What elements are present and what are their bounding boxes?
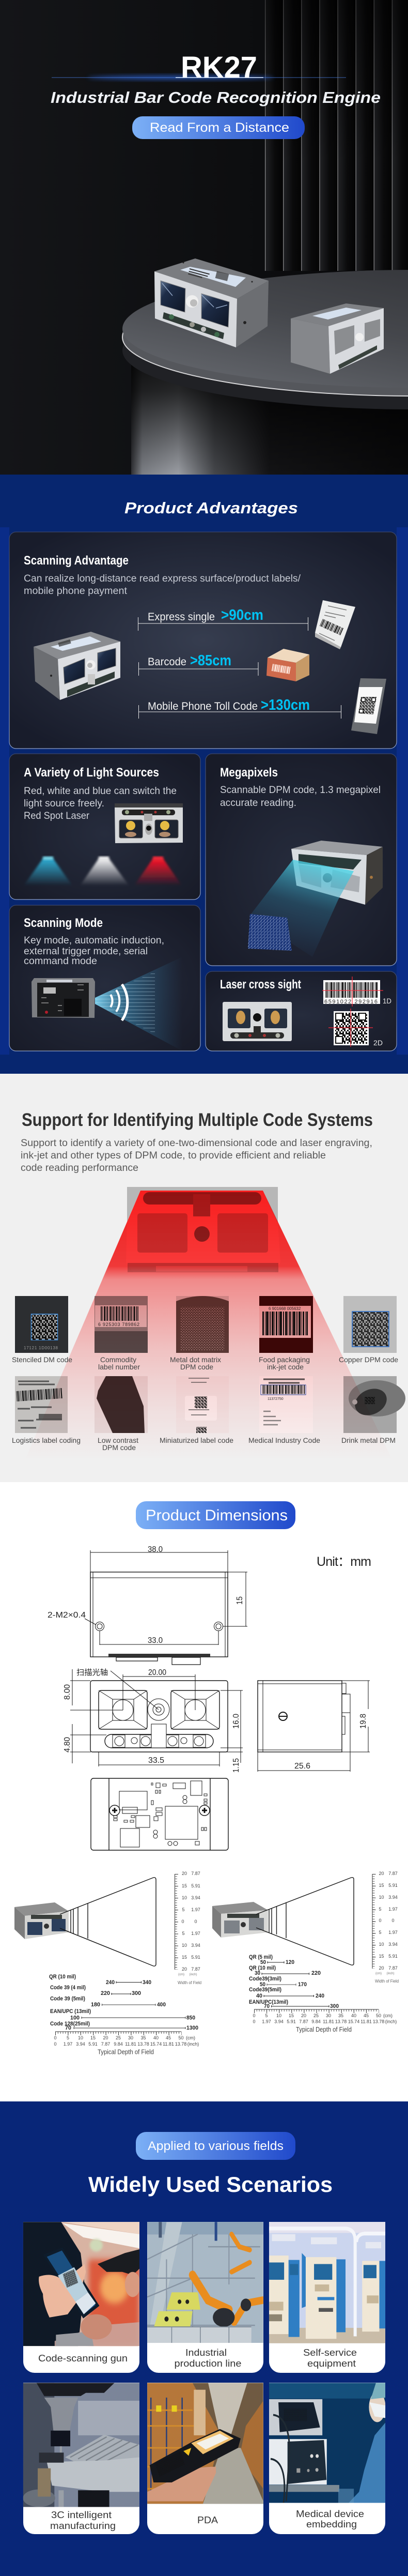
- drawing: front view: 33.5: [148, 1756, 164, 1765]
- depth ruler: 5.91: [287, 2019, 296, 2024]
- depth ruler: 1.97: [262, 2019, 271, 2024]
- thumbnail captions: Food packaging: [259, 1355, 310, 1364]
- photo: factory robots: [147, 2222, 263, 2343]
- depth ruler: 10: [276, 2013, 281, 2018]
- width scale: (inch): [386, 1972, 395, 1975]
- thumb: food packaging: [259, 1296, 313, 1353]
- depth ruler: 0: [253, 2013, 256, 2018]
- drawing: front view: 16.0: [232, 1714, 241, 1729]
- panel text: [24, 573, 301, 597]
- depth ranges: QR (5 mil): [249, 1954, 273, 1960]
- drawing: front view: 4.80: [63, 1737, 72, 1752]
- panel text: Key mode, automatic induction,: [24, 935, 164, 946]
- thumb: low contrast DPM: [95, 1376, 148, 1433]
- card: code-scanning gun: [23, 2222, 140, 2373]
- depth ruler: 50: [178, 2035, 184, 2040]
- distance: express single: >90cm: [221, 607, 263, 623]
- icon: red light cone: [134, 857, 182, 886]
- depth ranges: Code39(3mil): [249, 1976, 281, 1982]
- thumbnail captions: Copper DPM code: [339, 1355, 398, 1364]
- barcode 1D: 6591022 292916: [324, 999, 378, 1005]
- photo: medical equipment: [269, 2383, 386, 2503]
- caption: Medical device: [296, 2509, 364, 2519]
- thumbnail captions: label number: [98, 1363, 140, 1371]
- panel text: Red, white and blue can switch the: [24, 786, 177, 797]
- card: medical device embedding: [269, 2383, 386, 2534]
- depth ruler: 7.87: [101, 2041, 110, 2047]
- depth ruler: [253, 2009, 397, 2024]
- depth ranges: [249, 1954, 339, 2009]
- thumbnail captions: [12, 1355, 398, 1452]
- panel text: light source freely.: [24, 798, 104, 809]
- pill: product dimensions: [136, 1501, 295, 1529]
- icon: shipping label parcel: [315, 600, 355, 649]
- icon: cardboard box: [266, 649, 309, 681]
- width scale: 20: [379, 1965, 384, 1971]
- thumb: stenciled DM: 17121 1D00138: [24, 1346, 58, 1350]
- panel heading: Laser cross sight: [220, 978, 301, 992]
- drawing: top view: 15: [236, 1596, 244, 1605]
- section: code systems: [0, 1074, 408, 1482]
- section: product dimensions: [0, 1482, 408, 2101]
- depth ranges: 340: [143, 1979, 151, 1986]
- glow line: [52, 75, 346, 80]
- depth ranges: 50: [260, 1959, 266, 1965]
- thumb: medical code: [259, 1376, 313, 1433]
- panel text: mobile phone payment: [24, 586, 128, 597]
- thumbnail captions: DPM code: [102, 1443, 136, 1452]
- thumbnail captions: Stenciled DM code: [12, 1355, 72, 1364]
- panel: laser cross sight: [206, 971, 397, 1051]
- icon: scanner front: [223, 1002, 292, 1041]
- width scale: 1.97: [191, 1931, 200, 1936]
- label 2D: 2D: [373, 1039, 383, 1047]
- depth ranges: 300: [330, 2003, 339, 2009]
- depth ruler: 30: [128, 2035, 133, 2040]
- distance: mobile phone toll code: Mobile Phone Toll Code: [148, 700, 258, 712]
- drawing: top view: 33.0: [148, 1636, 163, 1645]
- depth ranges: 300: [132, 1990, 141, 1996]
- pill: applied to various fields: Applied to various fields: [148, 2139, 284, 2153]
- thumb: commodity label: [95, 1296, 148, 1353]
- depth ruler: 0: [54, 2041, 57, 2047]
- thumb: food packaging: 6 901668 005632: [269, 1306, 301, 1311]
- depth ruler: 13.78: [175, 2041, 186, 2047]
- thumb: medical code: 11372750: [268, 1397, 284, 1401]
- caption: production line: [175, 2358, 242, 2369]
- panel heading: Scanning Mode: [24, 916, 103, 930]
- card: 3C intelligent manufacturing: [23, 2383, 139, 2534]
- depth ruler: 13.78: [137, 2041, 149, 2047]
- panel text: Can realize long-distance read express surface/product labels/: [24, 573, 301, 584]
- icon: white light cone: [80, 857, 129, 886]
- panel: light sources: [9, 754, 200, 900]
- depth ruler: 11.81: [360, 2019, 372, 2024]
- depth ranges: Code 39 (4 mil): [50, 1985, 86, 1991]
- icon: blue light cone: [24, 857, 72, 886]
- card: PDA: [147, 2383, 263, 2534]
- icon: phone with QR: [351, 678, 386, 734]
- depth ruler: 10: [78, 2035, 83, 2040]
- depth ranges: 240: [106, 1979, 115, 1986]
- width scale: 3.94: [191, 1943, 200, 1948]
- depth ruler: 15.74: [348, 2019, 359, 2024]
- depth ruler: 11.81: [323, 2019, 334, 2024]
- panel text: command mode: [24, 956, 97, 967]
- caption: PDA: [197, 2515, 218, 2525]
- width scale: 3.94: [388, 1942, 398, 1947]
- depth ranges: 170: [298, 1981, 307, 1988]
- width scale: 5.91: [388, 1883, 398, 1888]
- depth ranges: EAN/UPC (13mil): [50, 2008, 91, 2015]
- width scale: 20: [182, 1967, 187, 1972]
- distance: barcode: [138, 652, 258, 676]
- thumbnail captions: Low contrast: [98, 1436, 138, 1444]
- width scale: 15: [182, 1955, 187, 1960]
- width scale: (cm): [178, 1973, 184, 1976]
- thumb: drink metal: [343, 1376, 405, 1433]
- width scale: 15: [379, 1883, 384, 1888]
- depth ranges: Code 128(25mil): [50, 2021, 90, 2027]
- QR code 2D: [328, 1009, 373, 1047]
- drawing: side view: [258, 1681, 370, 1772]
- panel text: Red Spot Laser: [24, 811, 90, 821]
- panel heading: A Variety of Light Sources: [24, 766, 159, 780]
- panel heading: Scanning Advantage: [24, 554, 129, 568]
- pill: product dimensions: Product Dimensions: [146, 1507, 288, 1524]
- depth ruler: 3.94: [274, 2019, 284, 2024]
- width scale: 10: [379, 1942, 384, 1947]
- caption: [303, 2348, 357, 2369]
- depth ruler: 25: [313, 2013, 319, 2018]
- label 1D: 1D: [383, 997, 391, 1005]
- depth ranges: QR (10 mil): [49, 1974, 76, 1980]
- distance: mobile phone toll code: >130cm: [261, 697, 310, 713]
- depth ranges: 100: [70, 2015, 80, 2021]
- card: industrial production line: [147, 2222, 263, 2373]
- panel text: Scannable DPM code, 1.3 megapixel: [220, 785, 381, 796]
- caption: embedding: [306, 2519, 357, 2529]
- depth ranges: 220: [101, 1990, 110, 1996]
- heading: Widely Used Scenarios: [88, 2172, 333, 2197]
- depth ranges: 40: [256, 1993, 262, 1999]
- red beam: [25, 1191, 393, 1460]
- depth ruler: 45: [166, 2035, 171, 2040]
- depth ranges: 120: [286, 1959, 294, 1965]
- description: [21, 1138, 372, 1173]
- depth ruler: 15.74: [150, 2041, 162, 2047]
- width scale: 5.91: [388, 1954, 398, 1959]
- depth ruler: 5.91: [88, 2041, 98, 2047]
- panel: scanning mode: [9, 905, 200, 1051]
- width scale: 10: [379, 1895, 384, 1900]
- thumbnail captions: Commodity: [100, 1355, 136, 1364]
- width scale: 15: [379, 1954, 384, 1959]
- thumb: miniaturized label: [176, 1376, 229, 1433]
- distance: mobile phone toll code: [138, 697, 341, 719]
- depth ruler: 40: [153, 2035, 159, 2040]
- width scale: 5.91: [191, 1883, 200, 1888]
- drawing: side view: 19.8: [359, 1714, 368, 1729]
- thumb: copper DPM: [343, 1296, 397, 1353]
- depth ranges: 400: [157, 2002, 166, 2008]
- width scale: 7.87: [191, 1871, 200, 1876]
- panel heading: Megapixels: [220, 766, 278, 780]
- drawing: top view: [48, 1545, 247, 1665]
- caption: equipment: [307, 2358, 356, 2369]
- icon: scanner left: [14, 1902, 69, 1939]
- depth ruler: 7.87: [299, 2019, 308, 2024]
- chart: left field of view: [14, 1871, 201, 2055]
- thumbnail captions: DPM code: [180, 1363, 213, 1371]
- depth ruler: 9.84: [114, 2041, 123, 2047]
- width scale: Width of Field: [375, 1979, 399, 1984]
- depth ruler: 5: [67, 2035, 69, 2040]
- width scale: 0: [181, 1919, 184, 1924]
- thumbnail captions: Medical Industry Code: [248, 1436, 320, 1444]
- icon: device with scan beam: [249, 841, 383, 957]
- pill: read from a distance: [132, 116, 305, 139]
- drawing: top view: 2-M2×0.4: [48, 1611, 86, 1620]
- depth ranges: 1300: [186, 2025, 198, 2031]
- depth ranges: 50: [260, 1981, 265, 1988]
- drawing: front view: 扫描光轴: [76, 1668, 108, 1677]
- card: self-service equipment: [269, 2222, 385, 2373]
- depth ruler: 1.97: [64, 2041, 72, 2047]
- depth ruler: (inch): [385, 2019, 397, 2024]
- width scale: 1.97: [388, 1930, 398, 1935]
- depth ruler: 13.78: [373, 2019, 384, 2024]
- depth ruler: 20: [301, 2013, 306, 2018]
- width scale: 0: [194, 1919, 197, 1924]
- icon: scanner front with LEDs: [115, 803, 183, 843]
- drawing: front view: [63, 1668, 243, 1773]
- depth ruler: 30: [326, 2013, 331, 2018]
- depth ranges: 70: [65, 2025, 71, 2031]
- pill: read from a distance: Read From a Distance: [150, 120, 289, 135]
- icon: scanner right: [212, 1902, 268, 1938]
- drawing: front view: 20.00: [148, 1668, 166, 1677]
- axis title: Typical Depth of Field: [98, 2048, 154, 2055]
- icon: DPM code: [248, 914, 292, 951]
- panel text: [24, 935, 164, 967]
- depth ranges: 70: [264, 2003, 270, 2009]
- width scale: 3.94: [191, 1895, 200, 1900]
- depth ruler: 0: [253, 2019, 256, 2024]
- depth ranges: 240: [316, 1993, 324, 1999]
- depth ruler: (cm): [383, 2013, 393, 2018]
- unit label: Unit：mm: [317, 1554, 371, 1569]
- thumbnail captions: Miniaturized label code: [160, 1436, 233, 1444]
- caption: [296, 2509, 364, 2529]
- description: Support to identify a variety of one-two-dimensional code and laser engraving,: [21, 1138, 372, 1149]
- depth ruler: 11.81: [163, 2041, 174, 2047]
- panel text: external trigger mode, serial: [24, 946, 148, 957]
- distance: barcode: Barcode: [148, 656, 186, 668]
- depth ranges: Code39(5mil): [249, 1987, 281, 1993]
- caption: Industrial: [185, 2348, 227, 2358]
- width scale: 15: [182, 1883, 187, 1888]
- depth ruler: 35: [338, 2013, 343, 2018]
- caption: 3C intelligent: [51, 2510, 112, 2520]
- width scale: 20: [379, 1871, 384, 1876]
- panel: scanning advantage: [9, 532, 397, 749]
- depth ruler: 25: [116, 2035, 121, 2040]
- chart: right field of view: [212, 1871, 399, 2033]
- width scale: (inch): [189, 1973, 197, 1976]
- section: scenarios: [0, 2101, 408, 2576]
- photo: phone scanning: [23, 2222, 140, 2348]
- thumbnail captions: Drink metal DPM: [341, 1436, 396, 1444]
- thumb: logistics label: [15, 1376, 68, 1433]
- depth ruler: 13.78: [335, 2019, 347, 2024]
- width scale: 5: [182, 1907, 185, 1912]
- depth ruler: 15: [90, 2035, 96, 2040]
- depth ranges: Code 39 (5mil): [50, 1995, 85, 2002]
- drawing: side view: 25.6: [294, 1762, 310, 1771]
- width scale: 1.97: [388, 1907, 398, 1912]
- drawing: front view: 1.15: [232, 1758, 241, 1773]
- depth ruler: 11.81: [125, 2041, 136, 2047]
- section: product advantages: [0, 475, 408, 1074]
- distance: express single: [138, 607, 308, 631]
- panel text: [220, 785, 381, 809]
- title: RK27: [181, 51, 257, 84]
- heading: Product Advantages: [124, 499, 298, 517]
- width scale: 10: [182, 1943, 187, 1948]
- icon: scanner pcb back: [32, 978, 95, 1018]
- thumb: stenciled DM: [15, 1296, 68, 1353]
- axis title: Typical Depth of Field: [296, 2025, 352, 2033]
- caption: [50, 2510, 116, 2531]
- secondary product device: [291, 303, 384, 374]
- icon: scanner device: [34, 632, 120, 700]
- depth ranges: 220: [311, 1970, 321, 1976]
- panel text: accurate reading.: [220, 798, 296, 809]
- width scale: 20: [182, 1871, 187, 1876]
- depth ruler: (inch): [187, 2041, 199, 2047]
- width scale: 5: [379, 1930, 382, 1935]
- FOV cone: [256, 1878, 354, 1965]
- width scale: (cm): [375, 1972, 382, 1975]
- distance: express single: Express single: [148, 611, 215, 623]
- drawing: top view: 38.0: [148, 1545, 163, 1554]
- depth ranges: 850: [186, 2015, 195, 2021]
- thumbnail captions: Logistics label coding: [12, 1436, 81, 1444]
- width scale: 7.87: [191, 1967, 200, 1972]
- thumb: metal dot matrix: [176, 1296, 229, 1353]
- width scale: 1.97: [191, 1907, 200, 1912]
- thumbnail captions: Metal dot matrix: [170, 1355, 221, 1364]
- depth ruler: 0: [54, 2035, 57, 2040]
- description: ink-jet and other types of DPM code, to provide efficient and reliable: [21, 1150, 326, 1161]
- icon: signal waves: [95, 957, 182, 1051]
- distance: barcode: >85cm: [190, 652, 231, 669]
- caption: manufacturing: [50, 2521, 116, 2531]
- width scale: 5: [379, 1907, 382, 1912]
- caption: [175, 2348, 242, 2369]
- FOV cone: [60, 1878, 156, 1966]
- depth ruler: 5: [265, 2013, 268, 2018]
- drawing: front view: 8.00: [63, 1684, 72, 1700]
- description: code reading performance: [21, 1163, 138, 1173]
- thumbnail captions: ink-jet code: [267, 1363, 304, 1371]
- main product device: [154, 258, 269, 347]
- depth ranges: EAN/UPC(13mil): [249, 1999, 288, 2005]
- width scale: 5.91: [191, 1955, 200, 1960]
- depth ranges: [49, 1974, 198, 2031]
- width scale: 0: [379, 1918, 382, 1923]
- depth ruler: 3.94: [76, 2041, 85, 2047]
- depth ruler: 50: [376, 2013, 381, 2018]
- depth ranges: 180: [91, 2002, 100, 2008]
- photo: CNC: [23, 2383, 139, 2507]
- depth ruler: 9.84: [311, 2019, 321, 2024]
- caption: Code-scanning gun: [38, 2353, 128, 2364]
- depth ruler: 45: [364, 2013, 369, 2018]
- depth ruler: (cm): [186, 2035, 195, 2040]
- thumb: commodity label: 6 925303 789862: [98, 1322, 139, 1327]
- thumbnail grid: [15, 1296, 405, 1433]
- depth ranges: 30: [255, 1970, 260, 1976]
- subtitle: Industrial Bar Code Recognition Engine: [51, 88, 381, 106]
- table pedestal: [122, 270, 408, 475]
- hero section: [0, 0, 408, 475]
- width scale: 7.87: [388, 1871, 398, 1876]
- pill: applied to various fields: [136, 2132, 295, 2160]
- width scale: 0: [391, 1918, 395, 1923]
- panel text: [24, 786, 177, 821]
- depth ruler: 40: [351, 2013, 356, 2018]
- barcode 1D: [322, 977, 383, 1007]
- heading: Support for Identifying Multiple Code Systems: [22, 1110, 373, 1130]
- depth ranges: QR (10 mil): [249, 1965, 276, 1971]
- drawing: back view pcb: [91, 1778, 228, 1850]
- width scale: [175, 1871, 201, 1985]
- width scale: 5: [182, 1931, 185, 1936]
- device front in red light: [126, 1187, 280, 1272]
- width scale: 3.94: [388, 1895, 398, 1900]
- width scale: Width of Field: [178, 1980, 201, 1985]
- caption: Self-service: [303, 2348, 357, 2358]
- depth ruler: 20: [103, 2035, 108, 2040]
- photo: kiosks: [269, 2222, 385, 2343]
- depth ruler: 35: [140, 2035, 146, 2040]
- width scale: 7.87: [388, 1965, 398, 1971]
- width scale: 10: [182, 1895, 187, 1900]
- photo: warehouse PDA: [147, 2383, 263, 2504]
- width scale: [372, 1871, 399, 1984]
- depth ruler: [54, 2032, 199, 2047]
- panel: megapixels: [206, 754, 397, 966]
- depth ruler: 15: [289, 2013, 294, 2018]
